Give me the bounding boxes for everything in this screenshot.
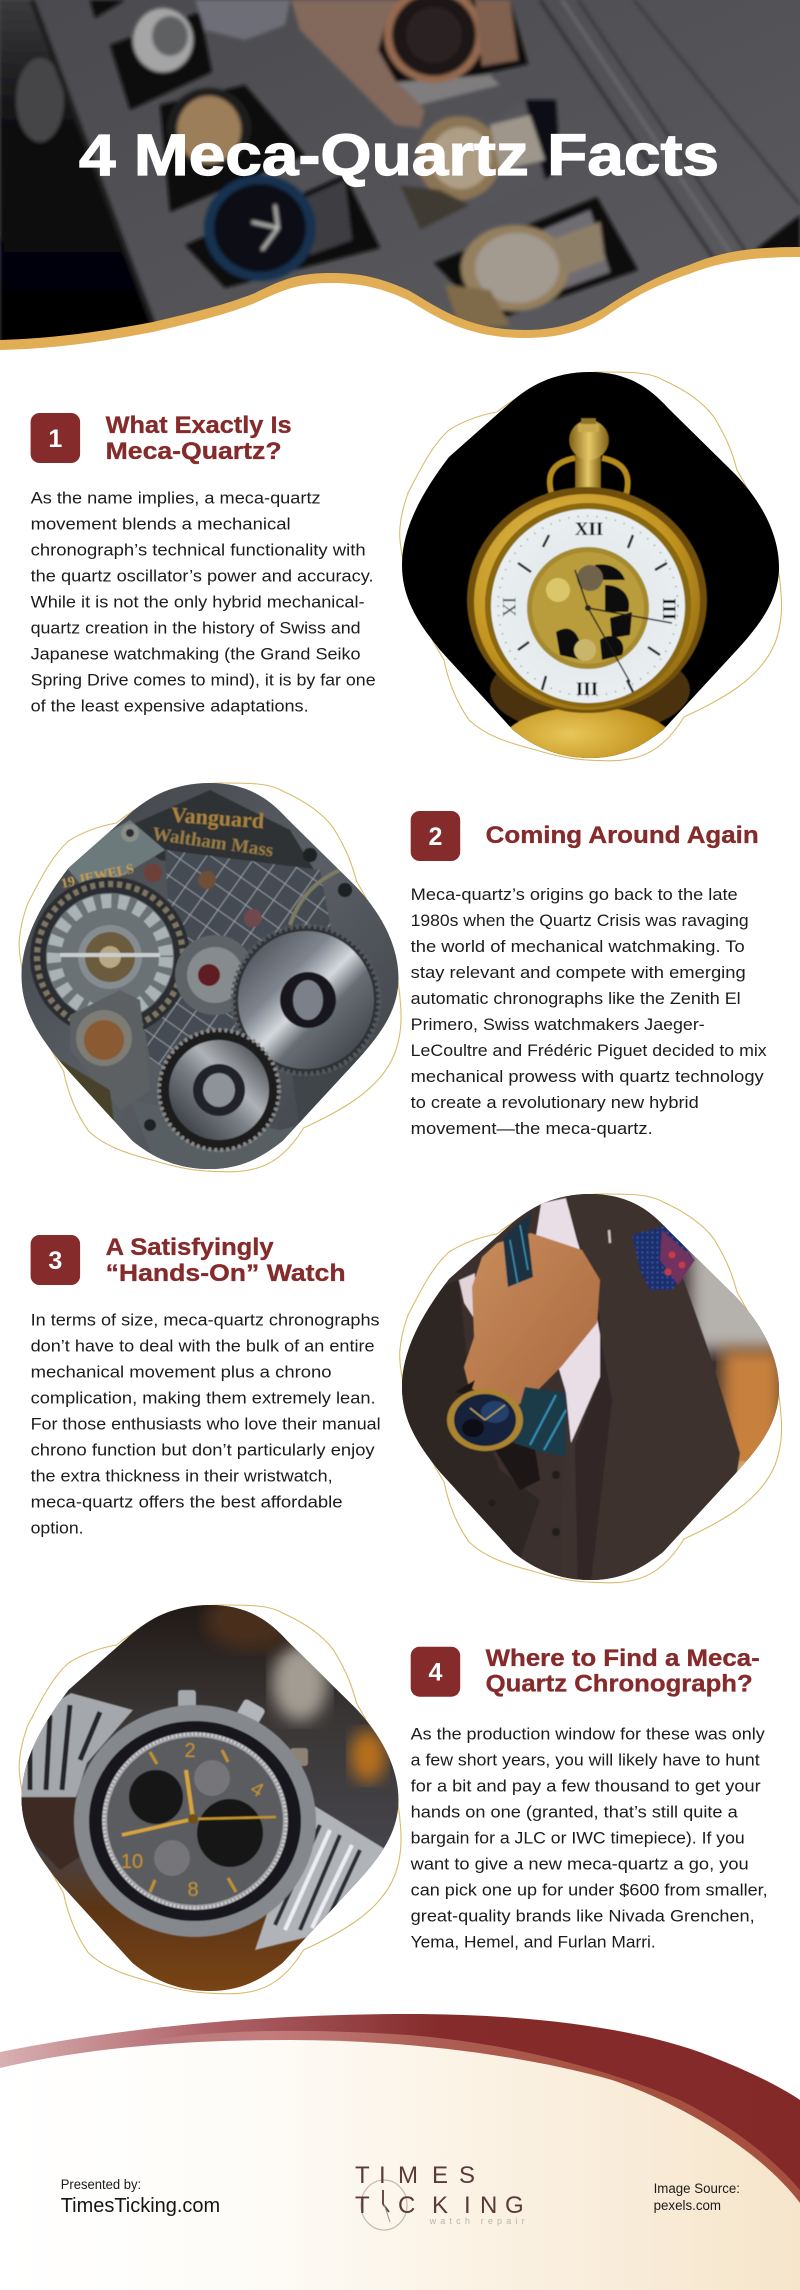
- body text 1: the quartz oscillator’s power and accuracy.: [31, 566, 374, 586]
- body text 3: In terms of size, meca-quartz chronographs: [31, 1310, 380, 1329]
- body text 2: LeCoultre and Frédéric Piguet decided to mix: [411, 1041, 767, 1060]
- body text 3: meca-quartz offers the best affordable: [31, 1492, 343, 1511]
- gold outline blob 4: [19, 1605, 401, 1994]
- section 1: what exactly is meca-quartz: [31, 370, 782, 783]
- heading 1: [106, 412, 292, 465]
- badge 4: 4: [428, 1658, 442, 1686]
- body text 4: bargain for a JLC or IWC timepiece). If you: [411, 1828, 745, 1847]
- photo: gold pocket watch: XII: [575, 519, 603, 540]
- photo: gold pocket watch: III: [576, 679, 598, 700]
- badge 1: 1: [48, 425, 62, 453]
- photo: gold pocket watch: IX: [498, 597, 519, 617]
- body text 4: want to give a new meca-quartz a go, you: [410, 1854, 749, 1873]
- title: 4 Meca-Quartz Facts: [79, 123, 719, 188]
- body text 1: Spring Drive comes to mind), it is by far one: [31, 670, 376, 690]
- logo: times ticking watch repair: watch repair: [429, 2216, 525, 2226]
- heading 1: What Exactly Is: [106, 412, 292, 439]
- body text 1: Japanese watchmaking (the Grand Seiko: [31, 644, 361, 664]
- body text 3: chrono function but don’t particularly enjoy: [31, 1440, 375, 1459]
- heading 3: [106, 1234, 346, 1287]
- heading 3: “Hands-On” Watch: [106, 1260, 346, 1287]
- footer wave band: [0, 2014, 800, 2290]
- body text 4: hands on one (granted, that’s still quite a: [411, 1802, 738, 1821]
- body text 4: great-quality brands like Nivada Grenchen,: [411, 1906, 755, 1925]
- body text 2: Primero, Swiss watchmakers Jaeger-: [411, 1015, 705, 1034]
- body text 2: 1980s when the Quartz Crisis was ravaging: [411, 911, 749, 930]
- body text 4: Yema, Hemel, and Furlan Marri.: [411, 1932, 656, 1951]
- photo: watch movement: Vanguard: [170, 802, 265, 833]
- gold outline blob 1: [400, 372, 782, 761]
- body text 3: complication, making them extremely lean.: [31, 1388, 376, 1407]
- body text 3: For those enthusiasts who love their manual: [31, 1414, 381, 1433]
- photo: watch movement: Waltham Mass: [151, 824, 275, 861]
- photo: steel chronograph: [18, 1590, 402, 1995]
- image source: Image Source:: [654, 2181, 740, 2196]
- heading 4: Quartz Chronograph?: [486, 1671, 753, 1698]
- logo: times ticking watch repair: [355, 2162, 525, 2230]
- photo: steel chronograph: 4: [247, 1777, 267, 1802]
- heading 3: A Satisfyingly: [106, 1234, 274, 1261]
- photo: watch movement: 19 JEWELS: [60, 862, 136, 892]
- photo: suit and wristwatch: [400, 1190, 782, 1590]
- badge 3: 3: [48, 1247, 62, 1275]
- body text 3: don’t have to deal with the bulk of an entire: [31, 1336, 375, 1355]
- section 3: a satisfyingly hands-on watch: [31, 1190, 782, 1590]
- badge 2: 2: [428, 823, 442, 851]
- photo: steel chronograph: 2: [184, 1740, 196, 1762]
- presented by: Presented by:: [61, 2177, 141, 2192]
- image source: [654, 2181, 740, 2213]
- body text 3: mechanical movement plus a chrono: [31, 1362, 332, 1381]
- photo: watch movement: [18, 780, 402, 1175]
- hero gold wave: [0, 247, 800, 372]
- logo: times ticking watch repair: TIMES: [355, 2162, 475, 2189]
- body text 3: option.: [31, 1518, 84, 1537]
- photo: gold pocket watch: III: [658, 598, 679, 620]
- body text 4: for a bit and pay a few thousand to get your: [411, 1776, 761, 1795]
- heading 4: [486, 1645, 760, 1698]
- badge 1: [31, 413, 80, 463]
- body text 1: [31, 488, 376, 716]
- badge 3: [31, 1235, 80, 1285]
- body text 4: As the production window for these was only: [411, 1724, 765, 1743]
- gold outline blob 3: [400, 1194, 782, 1583]
- body text 3: [31, 1310, 381, 1537]
- heading 4: Where to Find a Meca-: [486, 1645, 760, 1672]
- body text 4: can pick one up for under $600 from smaller,: [411, 1880, 768, 1899]
- body text 1: movement blends a mechanical: [31, 514, 291, 534]
- body text 1: quartz creation in the history of Swiss and: [31, 618, 361, 638]
- body text 1: While it is not the only hybrid mechanical-: [31, 592, 365, 612]
- heading 2: Coming Around Again: [486, 822, 759, 849]
- badge 4: [411, 1647, 460, 1697]
- body text 1: As the name implies, a meca-quartz: [31, 488, 321, 508]
- body text 2: to create a revolutionary new hybrid: [411, 1093, 699, 1112]
- body text 2: [411, 885, 767, 1138]
- body text 2: the world of mechanical watchmaking. To: [411, 937, 745, 956]
- presented by: [61, 2177, 220, 2217]
- body text 1: of the least expensive adaptations.: [31, 696, 309, 716]
- gold outline blob 2: [19, 783, 401, 1172]
- photo: steel chronograph: 8: [187, 1879, 199, 1901]
- body text 3: the extra thickness in their wristwatch,: [31, 1466, 333, 1485]
- heading 1: Meca-Quartz?: [106, 438, 282, 465]
- body text 2: Meca-quartz’s origins go back to the late: [411, 885, 738, 904]
- hero photo: watch tray: [0, 0, 800, 352]
- badge 2: [411, 811, 460, 861]
- body text 4: a few short years, you will likely have to hunt: [411, 1750, 760, 1769]
- section 2: coming around again: [18, 780, 767, 1175]
- photo: gold pocket watch: [400, 370, 782, 783]
- body text 2: stay relevant and compete with emerging: [411, 963, 746, 982]
- image source: pexels.com: [654, 2198, 721, 2213]
- body text 2: movement—the meca-quartz.: [411, 1119, 653, 1138]
- body text 4: [410, 1724, 768, 1951]
- body text 2: automatic chronographs like the Zenith El: [411, 989, 741, 1008]
- photo: steel chronograph: 10: [121, 1851, 143, 1873]
- body text 1: chronograph’s technical functionality with: [31, 540, 366, 560]
- presented by: TimesTicking.com: [61, 2195, 220, 2217]
- body text 2: mechanical prowess with quartz technology: [411, 1067, 764, 1086]
- section 4: where to find a meca-quartz chronograph: [18, 1590, 768, 1995]
- logo: times ticking watch repair: TCKING: [355, 2192, 524, 2219]
